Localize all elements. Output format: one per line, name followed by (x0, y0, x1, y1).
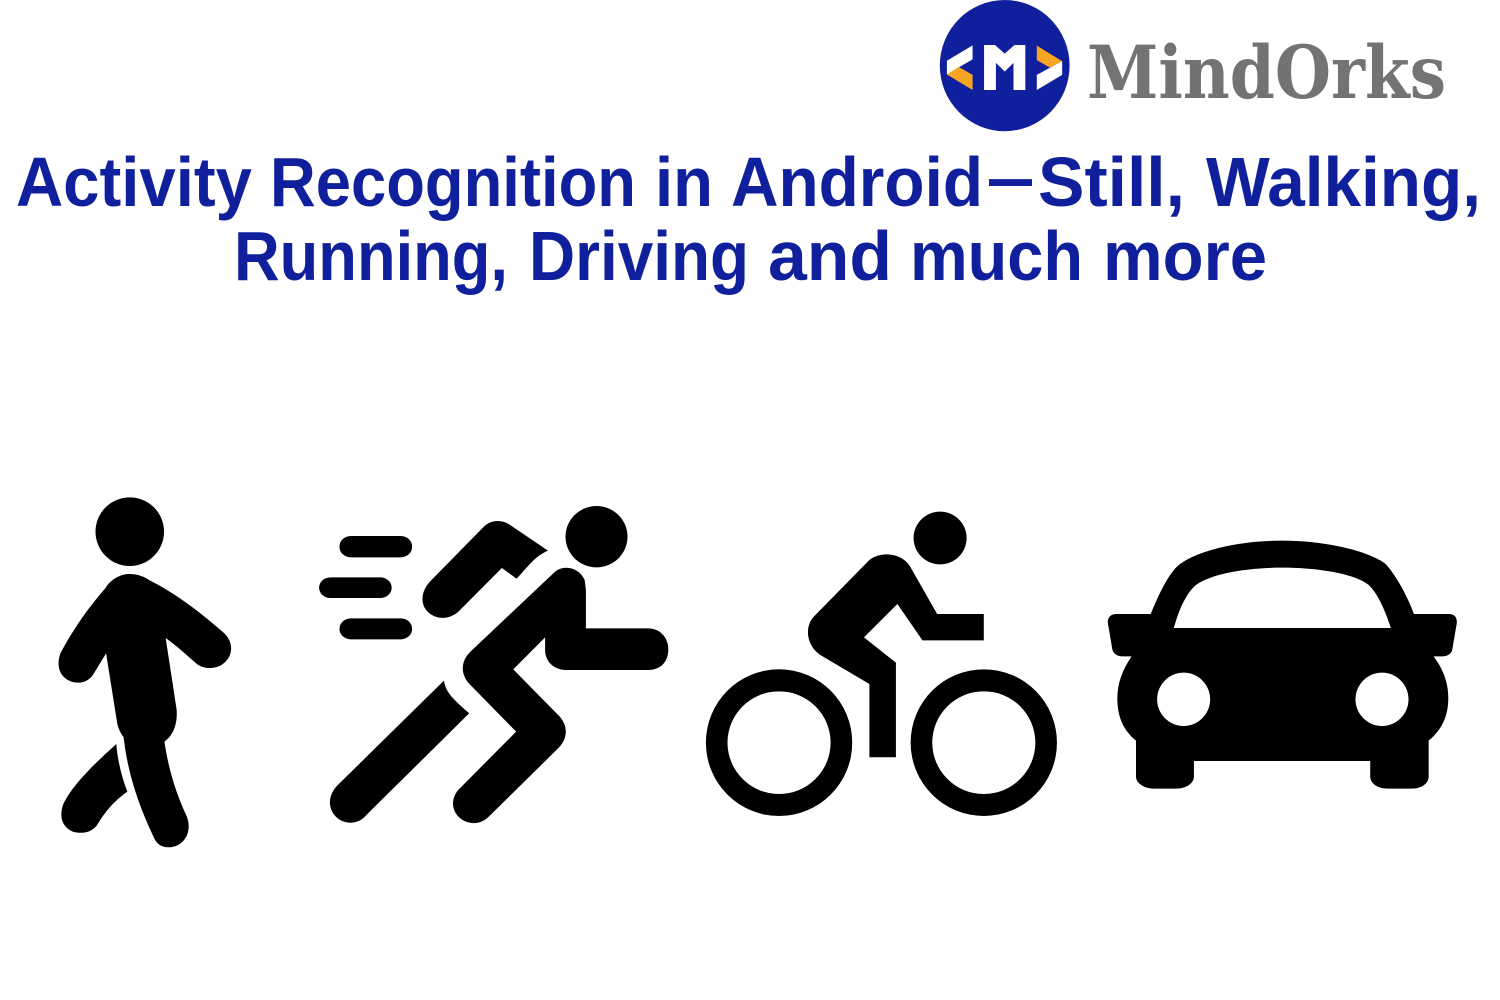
title: and (768, 217, 892, 295)
title (16, 138, 1481, 295)
title: much (910, 217, 1083, 295)
title: Still, (1038, 143, 1185, 221)
logo: MindOrks (940, 0, 1446, 131)
logo wordmark: MindOrks (1087, 30, 1446, 116)
icon: walking person (59, 497, 231, 847)
title: Recognition (270, 143, 636, 221)
title: Running, (234, 217, 508, 295)
title: Android (731, 143, 983, 221)
title: Driving (529, 217, 749, 295)
title: — (989, 138, 1032, 216)
title: Activity (16, 143, 252, 221)
icon: cyclist (706, 512, 1057, 816)
title: in (655, 143, 713, 221)
title: Walking, (1206, 143, 1481, 221)
icon: car (1108, 541, 1457, 789)
title: more (1103, 217, 1267, 295)
icon: running person (319, 506, 668, 823)
logo badge (940, 0, 1070, 131)
